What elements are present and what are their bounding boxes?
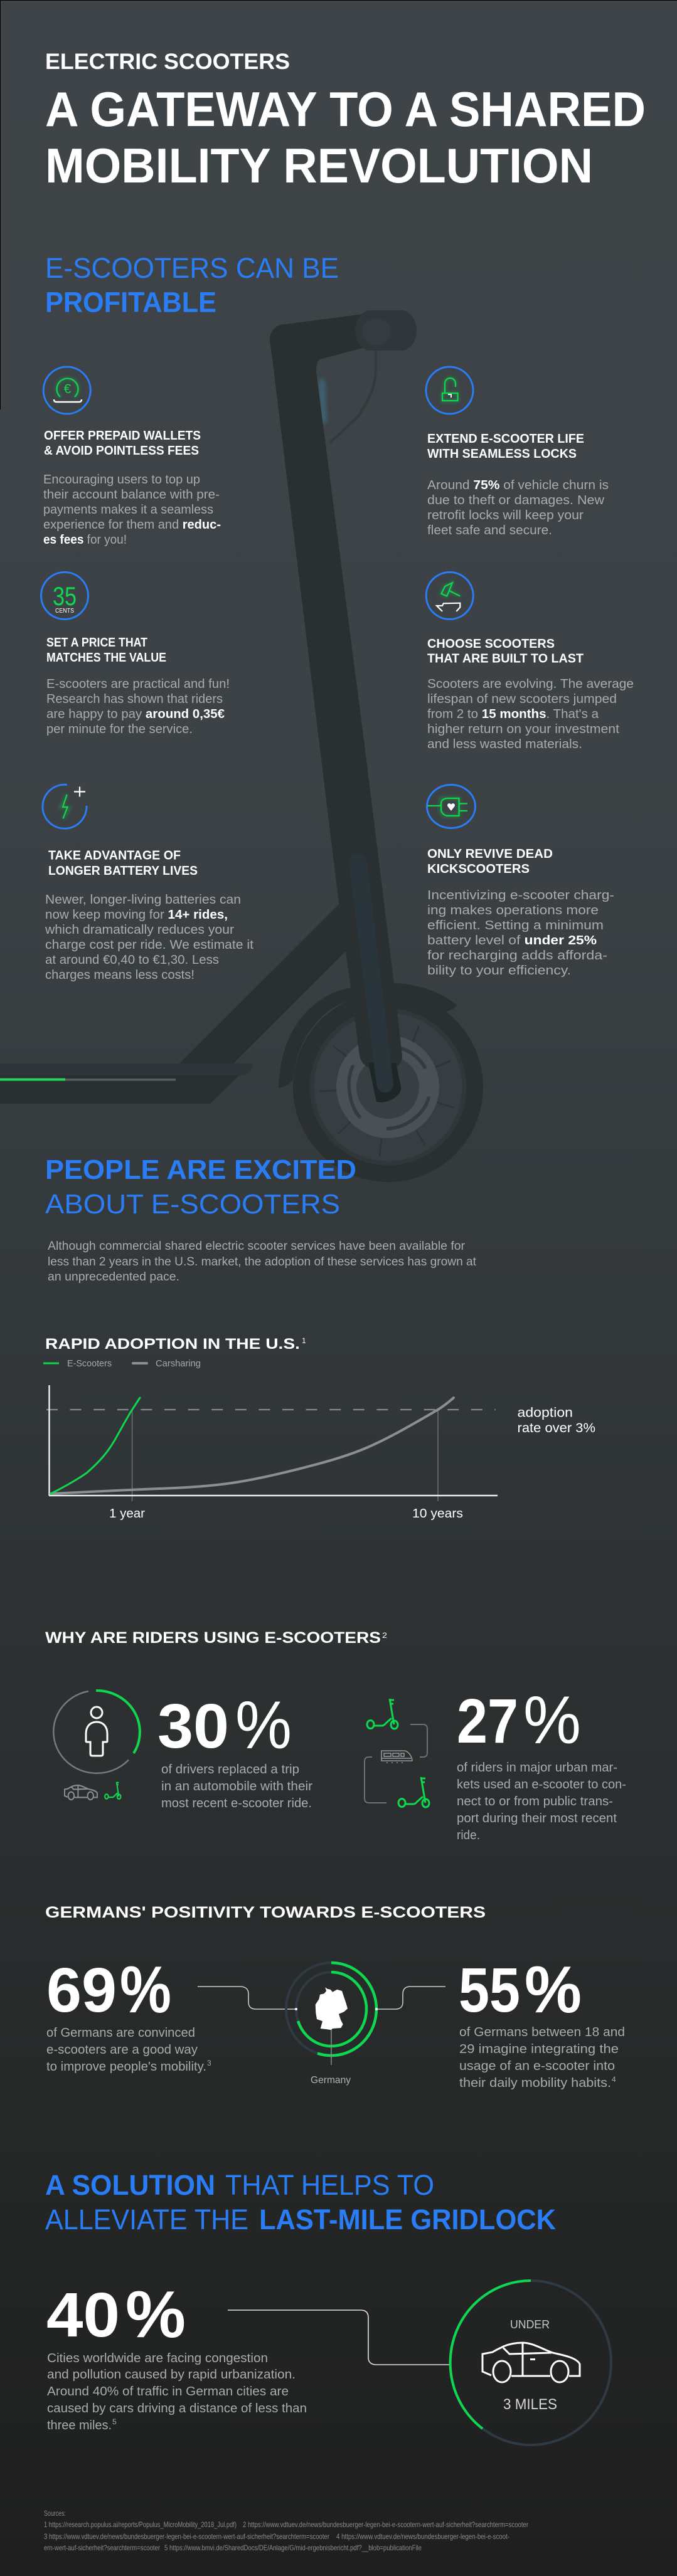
heading: people are excited bbox=[45, 1154, 356, 1220]
icon: hammer and anvil bbox=[426, 572, 473, 620]
text bbox=[427, 677, 634, 751]
stat: 55 percent bbox=[459, 1953, 625, 2090]
text bbox=[161, 1763, 312, 1810]
heading: MATCHES THE VALUE bbox=[46, 651, 166, 665]
chart legend: E-Scooters bbox=[67, 1358, 112, 1369]
heading: LONGER BATTERY LIVES bbox=[48, 864, 198, 878]
scooter brace bbox=[179, 904, 346, 1064]
heading: people are excited: PEOPLE ARE EXCITED bbox=[45, 1154, 356, 1185]
heading: THAT ARE BUILT TO LAST bbox=[427, 652, 584, 666]
text: and less wasted materials. bbox=[427, 737, 582, 751]
text bbox=[46, 2026, 211, 2074]
text: payments makes it a seamless bbox=[43, 503, 213, 517]
scooter stem glow bbox=[319, 379, 326, 423]
stat: 27 percent bbox=[365, 1682, 626, 1842]
text: of riders in major urban mar- bbox=[457, 1761, 617, 1775]
text bbox=[47, 2352, 307, 2432]
text: most recent e-scooter ride. bbox=[161, 1797, 312, 1810]
heading: a solution: LAST-MILE GRIDLOCK bbox=[259, 2204, 556, 2236]
icon: plug with heart bbox=[427, 785, 476, 828]
icon: euro coin: € bbox=[64, 382, 72, 396]
sources: 4 https://www.vdtuev.de/news/bundesbuerger-legen-bei-e-scoot- bbox=[336, 2532, 509, 2541]
map: germany bbox=[316, 1987, 348, 2030]
text: retrofit locks will keep your bbox=[427, 509, 584, 522]
icon: small scooter bbox=[105, 1782, 120, 1799]
heading: & AVOID POINTLESS FEES bbox=[44, 444, 199, 458]
scooter brake cable bbox=[330, 350, 376, 443]
heading: CHOOSE SCOOTERS bbox=[427, 637, 555, 651]
text: 4 bbox=[612, 2075, 616, 2084]
text bbox=[46, 677, 230, 736]
stat: 27 percent: % bbox=[523, 1682, 581, 1758]
text: are happy to pay around 0,35€ bbox=[46, 707, 225, 721]
title bbox=[45, 50, 646, 193]
text: charge cost per ride. We estimate it bbox=[45, 938, 253, 952]
icon: 35 cents: 35 bbox=[53, 581, 77, 611]
heading bbox=[427, 432, 584, 461]
text: three miles. bbox=[47, 2419, 112, 2432]
stat: 69 percent: 69 bbox=[46, 1955, 117, 2025]
sources bbox=[44, 2509, 528, 2552]
heading: rapid adoption: RAPID ADOPTION IN THE U.S. bbox=[45, 1336, 300, 1353]
text: Incentivizing e-scooter charg- bbox=[427, 889, 614, 902]
text: Cities worldwide are facing congestion bbox=[47, 2352, 268, 2365]
text: e-scooters are a good way bbox=[46, 2043, 198, 2057]
intro text: Although commercial shared electric scooter services have been available for bbox=[48, 1240, 466, 1253]
chart callout: rate over 3% bbox=[517, 1421, 595, 1435]
icon: small car bbox=[65, 1785, 97, 1800]
text: fleet safe and secure. bbox=[427, 524, 552, 537]
panel: battery lives bbox=[43, 784, 253, 982]
stat: 69 percent bbox=[46, 1953, 211, 2074]
text bbox=[427, 889, 614, 978]
text: of Germans are convinced bbox=[46, 2026, 195, 2040]
text: ing makes operations more bbox=[427, 904, 599, 917]
intro text: an unprecedented pace. bbox=[48, 1270, 179, 1284]
text: es fees for you! bbox=[43, 533, 127, 547]
text: Research has shown that riders bbox=[46, 692, 223, 706]
text: battery level of under 25% bbox=[427, 934, 597, 948]
text: charges means less costs! bbox=[45, 968, 195, 982]
text: lifespan of new scooters jumped bbox=[427, 692, 617, 706]
scooter blue fork stripe bbox=[349, 853, 393, 1092]
heading: profitable: PROFITABLE bbox=[45, 286, 216, 319]
text: Newer, longer-living batteries can bbox=[45, 893, 241, 907]
panel: kickscooters bbox=[427, 785, 614, 978]
stat: 30 percent bbox=[53, 1687, 312, 1810]
icon: scooter to train to scooter bbox=[365, 1699, 429, 1807]
intro text bbox=[48, 1240, 477, 1284]
text: now keep moving for 14+ rides, bbox=[45, 908, 228, 922]
text bbox=[459, 2025, 625, 2090]
chart legend: Carsharing bbox=[156, 1358, 201, 1369]
heading bbox=[46, 636, 166, 665]
heading: OFFER PREPAID WALLETS bbox=[44, 429, 201, 443]
text: port during their most recent bbox=[457, 1812, 617, 1825]
kicker: ELECTRIC SCOOTERS bbox=[45, 50, 290, 74]
sources: 2 https://www.vdtuev.de/news/bundesbuerger-legen-bei-e-scootern-wert-auf-sicherheit?searchterm=scooter bbox=[243, 2520, 528, 2529]
chart legend bbox=[43, 1358, 201, 1369]
text: efficient. Setting a minimum bbox=[427, 919, 604, 932]
heading: WITH SEAMLESS LOCKS bbox=[427, 447, 577, 461]
text bbox=[457, 1761, 626, 1842]
heading: KICKSCOOTERS bbox=[427, 862, 530, 876]
chart: under 3 miles: 3 MILES bbox=[503, 2396, 557, 2413]
heading: ONLY REVIVE DEAD bbox=[427, 847, 553, 861]
text: Around 75% of vehicle churn is bbox=[427, 478, 609, 492]
sources: ern-wert-auf-sicherheit?searchterm=scooter bbox=[44, 2543, 160, 2552]
stat: 40 percent bbox=[46, 2278, 307, 2432]
text: their account balance with pre- bbox=[43, 488, 220, 502]
text: caused by cars driving a distance of less than bbox=[47, 2402, 307, 2415]
text: per minute for the service. bbox=[46, 722, 193, 736]
heading: TAKE ADVANTAGE OF bbox=[48, 849, 181, 863]
text: 5 bbox=[112, 2417, 117, 2426]
scooter handle head bbox=[355, 310, 417, 351]
text: of drivers replaced a trip bbox=[161, 1763, 299, 1776]
text: Scooters are evolving. The average bbox=[427, 677, 634, 691]
heading: profitable: E-SCOOTERS CAN BE bbox=[45, 252, 339, 284]
sources: 5 https://www.bmvi.de/SharedDocs/DE/Anlage/G/mid-ergebnisbericht.pdf?__blob=publicationFile bbox=[164, 2543, 422, 2552]
panel: durable scooters bbox=[426, 572, 634, 751]
heading: why riders: WHY ARE RIDERS USING E-SCOOTERS bbox=[45, 1629, 381, 1647]
headline line two: MOBILITY REVOLUTION bbox=[45, 138, 593, 193]
text: from 2 to 15 months. That's a bbox=[427, 707, 599, 721]
heading: a solution: ALLEVIATE THE bbox=[45, 2204, 248, 2236]
sources: 3 https://www.vdtuev.de/news/bundesbuerger-legen-bei-e-scootern-wert-auf-sicherheit?searchterm=scooter bbox=[44, 2532, 329, 2541]
panel: prepaid wallets bbox=[43, 367, 221, 547]
intro text: less than 2 years in the U.S. market, the adoption of these services has grown at bbox=[48, 1255, 477, 1269]
heading: profitable bbox=[45, 252, 339, 319]
value: 30 bbox=[157, 1691, 229, 1761]
icon: euro coin bbox=[43, 367, 90, 414]
scooter mudguard bbox=[279, 983, 457, 1088]
value: 27 bbox=[457, 1686, 518, 1756]
text: due to theft or damages. New bbox=[427, 494, 605, 507]
chart: germany rings: Germany bbox=[311, 2075, 351, 2086]
text bbox=[43, 473, 221, 547]
text: experience for them and reduc- bbox=[43, 518, 221, 532]
heading bbox=[427, 637, 584, 666]
stat: 69 percent: % bbox=[120, 1953, 171, 2027]
text: higher return on your investment bbox=[427, 722, 619, 736]
chart callout: adoption bbox=[517, 1406, 573, 1420]
sources: Sources: bbox=[44, 2509, 66, 2518]
text bbox=[45, 893, 253, 982]
heading: a solution: THAT HELPS TO bbox=[225, 2169, 434, 2201]
stat: 40 percent: % bbox=[125, 2278, 186, 2352]
chart callout bbox=[517, 1406, 595, 1435]
text: ride. bbox=[457, 1829, 480, 1842]
line chart: adoption bbox=[46, 1385, 498, 1521]
text: E-scooters are practical and fun! bbox=[46, 677, 230, 691]
text: to improve people's mobility. bbox=[46, 2060, 206, 2074]
headline line one: A GATEWAY TO A SHARED bbox=[45, 82, 646, 137]
heading: EXTEND E-SCOOTER LIFE bbox=[427, 432, 584, 446]
scooter wheel bbox=[293, 992, 483, 1182]
stat: 55 percent: % bbox=[525, 1953, 582, 2027]
icon: charging bolt bbox=[43, 784, 87, 828]
icon: car bbox=[482, 2343, 580, 2382]
text: their daily mobility habits. bbox=[459, 2076, 611, 2090]
text: 3 bbox=[207, 2059, 211, 2067]
text: usage of an e-scooter into bbox=[459, 2059, 615, 2073]
heading: why riders: 2 bbox=[382, 1631, 387, 1640]
heading: people are excited: ABOUT E-SCOOTERS bbox=[45, 1189, 340, 1220]
panel: seamless locks bbox=[426, 367, 609, 537]
text: and pollution caused by rapid urbanization. bbox=[47, 2368, 296, 2382]
scooter fork tip bbox=[368, 1063, 401, 1102]
line chart: adoption: 10 years bbox=[412, 1507, 463, 1521]
heading: a solution bbox=[45, 2169, 556, 2236]
icon: open lock bbox=[426, 367, 473, 414]
text: which dramatically reduces your bbox=[45, 923, 234, 937]
text: Encouraging users to top up bbox=[43, 473, 200, 487]
icon: 35 cents: CENTS bbox=[55, 608, 74, 615]
stat: 55 percent: 55 bbox=[459, 1955, 520, 2025]
stat: 30 percent: % bbox=[235, 1687, 292, 1763]
text: in an automobile with their bbox=[161, 1780, 312, 1793]
text: bility to your efficiency. bbox=[427, 964, 571, 978]
heading bbox=[44, 429, 201, 458]
scooter stem and handle bbox=[270, 314, 402, 1071]
icon: person ring bbox=[53, 1691, 140, 1773]
chart: germany rings bbox=[198, 1963, 445, 2086]
icon: 35 cents bbox=[41, 572, 88, 620]
heading bbox=[48, 849, 198, 878]
chart: under 3 miles bbox=[228, 2281, 611, 2445]
text: for recharging adds afforda- bbox=[427, 949, 607, 963]
scooter deck bbox=[0, 1064, 253, 1104]
chart: under 3 miles: UNDER bbox=[510, 2318, 550, 2331]
text: at around €0,40 to €1,30. Less bbox=[45, 953, 219, 967]
heading bbox=[427, 847, 553, 876]
heading: SET A PRICE THAT bbox=[46, 636, 147, 650]
text: 29 imagine integrating the bbox=[459, 2042, 619, 2056]
stat: 40 percent: 40 bbox=[46, 2280, 120, 2350]
text: nect to or from public trans- bbox=[457, 1795, 613, 1808]
heading: germans positivity: GERMANS' POSITIVITY TOWARDS E-SCOOTERS bbox=[45, 1904, 486, 1921]
text: kets used an e-scooter to con- bbox=[457, 1778, 626, 1792]
text bbox=[427, 478, 609, 537]
text: of Germans between 18 and bbox=[459, 2025, 625, 2039]
heading: a solution: A SOLUTION bbox=[45, 2169, 215, 2201]
line chart: adoption: 1 year bbox=[109, 1507, 145, 1521]
panel: price bbox=[41, 572, 230, 736]
heading: rapid adoption: 1 bbox=[302, 1336, 306, 1345]
scooter illustration bbox=[0, 310, 483, 1182]
text: Around 40% of traffic in German cities are bbox=[47, 2385, 289, 2399]
sources: 1 https://research.populus.ai/reports/Populus_MicroMobility_2018_Jul.pdf) bbox=[44, 2520, 237, 2529]
